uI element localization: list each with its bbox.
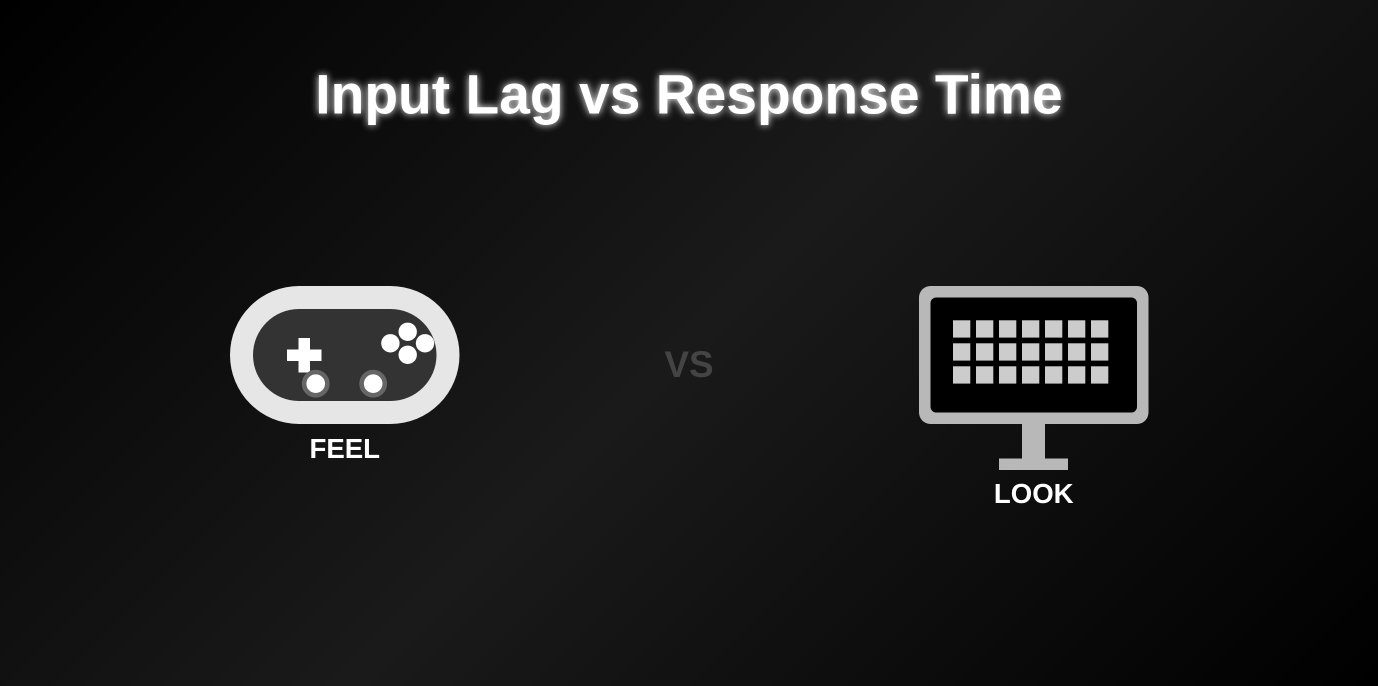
pixel grid <box>953 320 1108 384</box>
label: feel: FEEL <box>309 433 380 464</box>
monitor frame <box>919 286 1148 424</box>
d-pad <box>287 338 322 372</box>
vs label: VS <box>664 344 714 385</box>
panel: feel <box>230 286 460 464</box>
icon: game controller <box>230 286 460 424</box>
right thumbstick <box>362 372 385 395</box>
controller face <box>253 309 436 401</box>
monitor stand <box>1022 424 1045 458</box>
panel: look <box>919 286 1148 509</box>
label: look: LOOK <box>994 478 1074 509</box>
monitor base <box>999 458 1068 470</box>
monitor screen <box>930 298 1137 412</box>
icon: monitor <box>919 286 1148 470</box>
title: Input Lag vs Response Time <box>315 65 1063 126</box>
left thumbstick <box>304 372 327 395</box>
action buttons <box>381 323 434 364</box>
controller body <box>230 286 460 424</box>
